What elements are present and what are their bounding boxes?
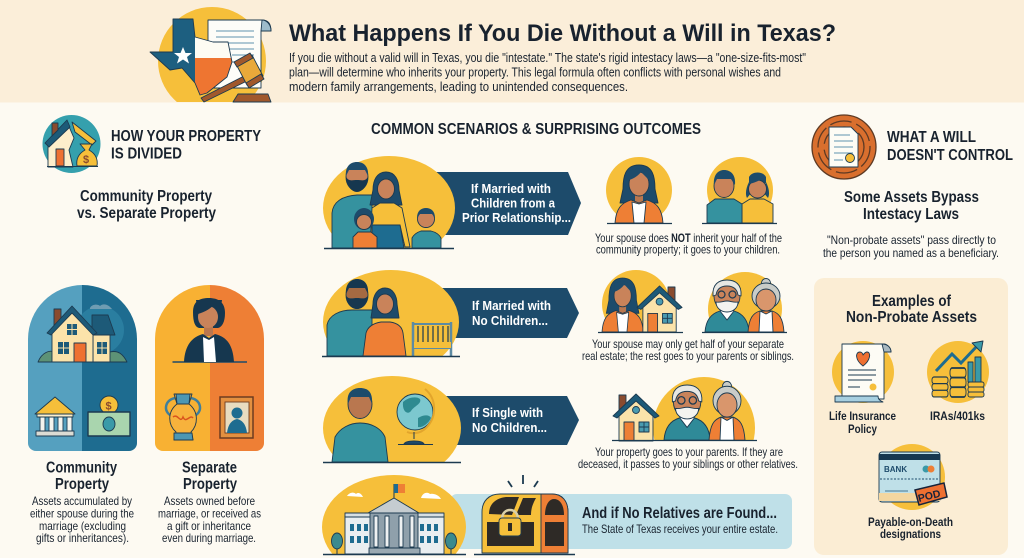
- panel heading: Examples of: [872, 293, 952, 310]
- labels: IRAs/401ks: [930, 409, 985, 423]
- outcome text: community property; it goes to your children.: [596, 242, 780, 256]
- banner arrow: [430, 288, 579, 338]
- outcome text: real estate; the rest goes to your parents or siblings.: [582, 349, 794, 363]
- icon: house and parents: [612, 377, 757, 442]
- icon: money: [88, 396, 130, 436]
- community property text: gifts or inheritances).: [36, 531, 129, 545]
- icon: children: [702, 157, 777, 224]
- heading: [111, 128, 261, 162]
- panel: what a will doesn't control: [812, 115, 1013, 260]
- header band: [0, 0, 1024, 102]
- label: payable on death: [868, 515, 953, 541]
- subheading: [77, 188, 216, 222]
- separate property text: Separate: [182, 460, 237, 476]
- labels: Life Insurance: [829, 409, 896, 423]
- subheading: Some Assets Bypass: [844, 189, 979, 206]
- icon: house: [38, 304, 127, 362]
- community property text: Assets accumulated by: [32, 494, 132, 508]
- scenario 3: single with no children: [323, 376, 798, 480]
- banner arrow: If Single with: [472, 405, 543, 420]
- intro paragraph: plan—will determine who inherits your property. This legal formula often conflicts with personal wishes and: [289, 64, 781, 80]
- heading: IS DIVIDED: [111, 146, 182, 162]
- icon: person: [172, 298, 247, 362]
- subheading: Intestacy Laws: [863, 206, 959, 223]
- label: payable on death: designations: [880, 527, 941, 541]
- banner arrow: No Children...: [472, 420, 547, 435]
- community property text: Community: [46, 460, 117, 476]
- heading: [887, 129, 1013, 164]
- separate property text: a gift or inheritance: [167, 519, 251, 533]
- callout band: [450, 494, 792, 549]
- outcome text: [578, 445, 798, 471]
- community property text: Property: [55, 476, 109, 493]
- community property text: marriage (excluding: [39, 519, 126, 533]
- label: payable on death: Payable-on-Death: [868, 515, 953, 529]
- icon: locked chest: [474, 475, 575, 554]
- explanation text: "Non-probate assets" pass directly to: [827, 233, 996, 247]
- heading: HOW YOUR PROPERTY: [111, 128, 261, 145]
- panel: community property arch: [28, 280, 138, 452]
- panel: examples of non-probate assets: [814, 278, 1008, 555]
- icon: payable-on-death bank card: POD: [917, 488, 942, 505]
- banner arrow: If Married with: [472, 298, 551, 313]
- intro paragraph: modern family arrangements, leading to unintended consequences.: [289, 79, 628, 94]
- banner arrow: Children from a: [471, 196, 556, 210]
- icon: payable-on-death bank card: [879, 444, 947, 510]
- icon: IRAs and 401ks: [927, 341, 989, 403]
- intro paragraph: [289, 50, 806, 94]
- icon: spouse: [606, 157, 672, 224]
- community property text: either spouse during the: [30, 506, 134, 520]
- icon: vase: [166, 394, 200, 440]
- outcome text: [582, 337, 794, 363]
- banner arrow: If Married with: [471, 181, 551, 196]
- separate property text: marriage, or received as: [158, 506, 261, 520]
- icon: bank: [35, 397, 75, 436]
- banner arrow: [430, 396, 579, 445]
- scenario 1: married with children from a prior relationship: [323, 156, 782, 260]
- icon: payable-on-death bank card: BANK: [884, 465, 907, 474]
- separate property text: Assets owned before: [164, 494, 255, 508]
- panel heading: Non-Probate Assets: [846, 309, 977, 326]
- labels: [829, 409, 985, 436]
- separate property text: [158, 460, 261, 545]
- banner arrow: [425, 172, 581, 235]
- icon: split house and money bag: $: [83, 154, 89, 166]
- icon: framed portrait: [220, 397, 253, 438]
- explanation text: [823, 233, 999, 260]
- labels: Policy: [848, 422, 877, 436]
- illustration: blended family: [323, 156, 455, 250]
- outcome text: Your property goes to your parents. If they are: [595, 445, 783, 459]
- icon: life insurance policy: [832, 341, 894, 403]
- banner arrow: Prior Relationship...: [462, 210, 571, 225]
- separate property text: Property: [183, 476, 237, 493]
- illustration: state capitol: [322, 475, 466, 558]
- outcome text: [595, 231, 782, 256]
- separate property text: even during marriage.: [162, 531, 256, 545]
- panel: how your property is divided: [42, 115, 261, 222]
- banner arrow: No Children...: [472, 313, 548, 328]
- subheading: [844, 189, 979, 223]
- callout text: The State of Texas receives your entire estate.: [582, 522, 778, 536]
- header illustration: Texas, will and gavel: [150, 7, 272, 102]
- callout heading: And if No Relatives are Found...: [582, 505, 777, 522]
- subheading: Community Property: [80, 188, 212, 205]
- community property text: [30, 460, 134, 545]
- panel heading: [846, 293, 977, 326]
- icon: split house and money bag: [42, 115, 100, 173]
- heading: common scenarios: COMMON SCENARIOS & SURPRISING OUTCOMES: [371, 121, 701, 138]
- outcome text: Your spouse does NOT inherit your half of the: [595, 231, 782, 245]
- illustration: person and globe: [323, 376, 461, 464]
- panel: separate property arch: [155, 280, 265, 452]
- icon: spouse and house: [598, 270, 683, 338]
- heading: WHAT A WILL: [887, 129, 976, 146]
- icon: parents: [702, 272, 787, 334]
- icon: will in maze: [812, 115, 876, 179]
- scenario 2: married with no children: [322, 270, 794, 362]
- subheading: vs. Separate Property: [77, 205, 216, 222]
- scenario 4: no relatives found: [322, 475, 792, 558]
- intro paragraph: If you die without a valid will in Texas, you die "intestate." The state's rigid intestacy laws—a "one-size-fits-most": [289, 50, 806, 65]
- icon: money: $: [106, 400, 112, 412]
- illustration: couple and crib: [322, 270, 460, 358]
- outcome text: Your spouse may only get half of your separate: [592, 337, 784, 351]
- outcome text: deceased, it passes to your siblings or other relatives.: [578, 457, 798, 471]
- title: What Happens If You Die Without a Will in Texas?: [289, 20, 836, 47]
